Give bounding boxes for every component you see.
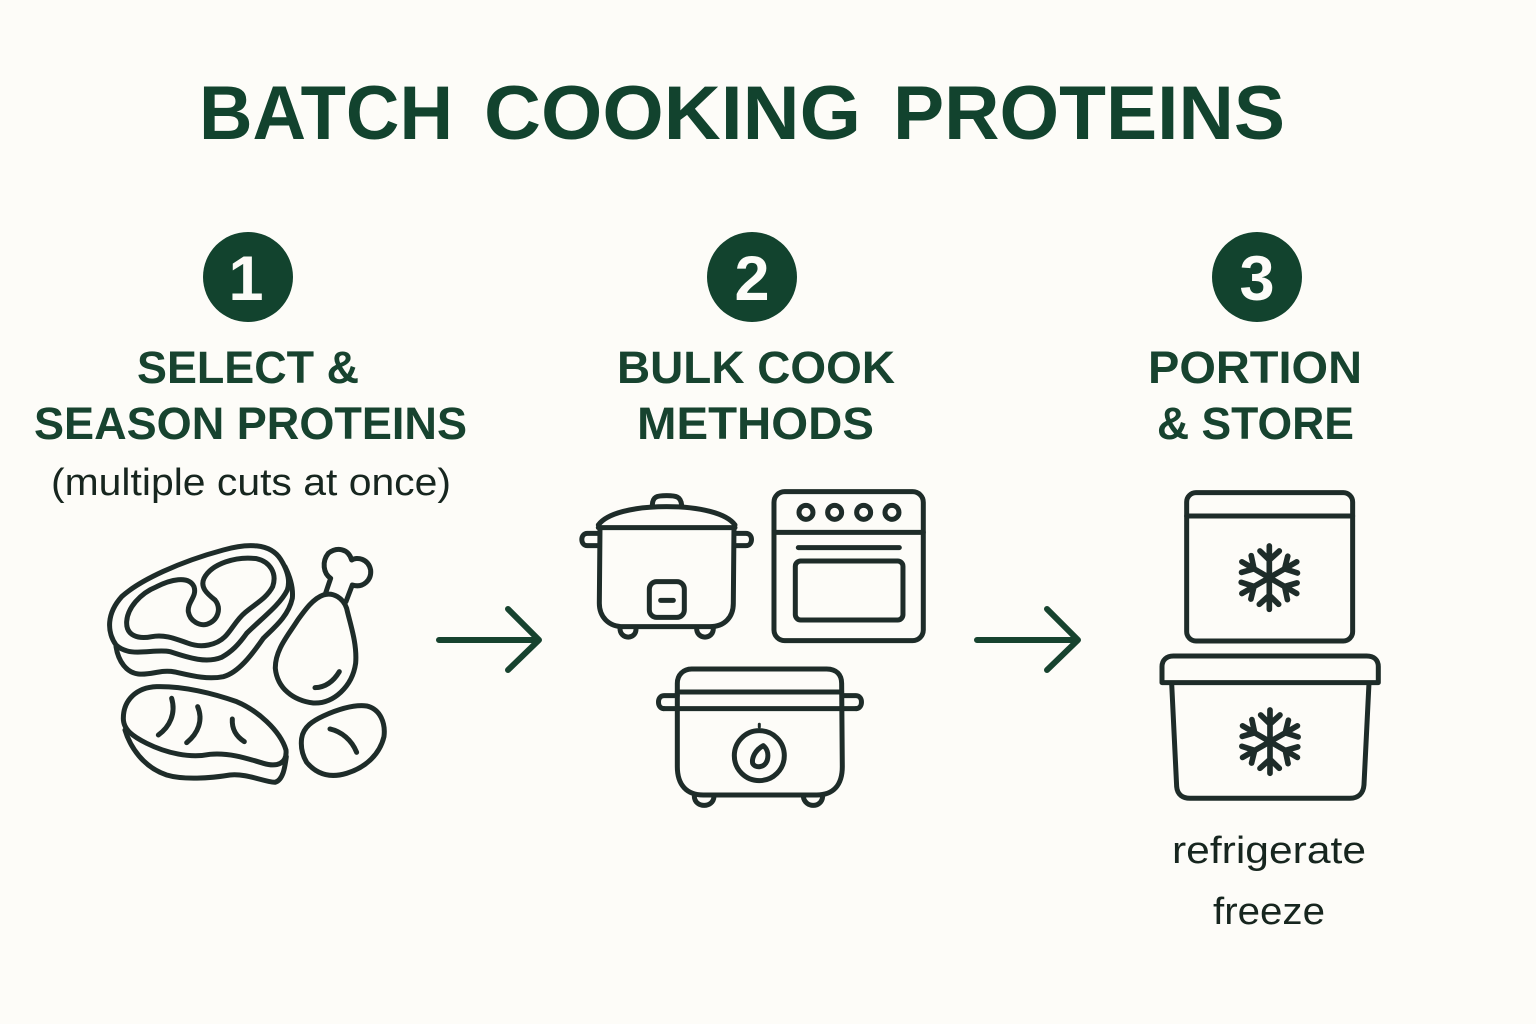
step 3 number badge xyxy=(1212,232,1302,322)
icon: storage containers xyxy=(1162,493,1378,798)
storage labels: refrigerate xyxy=(1172,830,1366,872)
arrow: step 2 to step 3 xyxy=(977,609,1078,670)
step 1 subtitle: (multiple cuts at once) xyxy=(51,462,451,504)
storage labels xyxy=(1172,830,1366,933)
step 3 number badge: 3 xyxy=(1239,244,1275,314)
icon: oven xyxy=(774,492,923,641)
step 1 heading: SELECT & xyxy=(137,342,359,393)
arrow: step 1 to step 2 xyxy=(439,609,539,670)
icon: cooking appliances xyxy=(582,492,923,805)
step 1 number badge xyxy=(203,232,293,322)
title: PROTEINS xyxy=(893,71,1285,156)
title: BATCH xyxy=(199,71,453,156)
icon: lower container with snowflake xyxy=(1162,656,1378,798)
step 2 column xyxy=(582,232,923,805)
step 2 heading xyxy=(617,342,896,449)
step 1 heading xyxy=(34,342,467,449)
icon: rice cooker xyxy=(582,496,751,637)
title: COOKING xyxy=(484,71,861,156)
step 2 heading: BULK COOK xyxy=(617,342,896,393)
icon: assorted protein cuts xyxy=(110,546,384,782)
step 2 heading: METHODS xyxy=(637,398,874,449)
step 3 heading: & STORE xyxy=(1157,398,1354,449)
icon: t-bone steak xyxy=(110,546,292,678)
step 3 heading: PORTION xyxy=(1148,342,1362,393)
step 1 number badge: 1 xyxy=(228,244,264,314)
step 3 heading xyxy=(1148,342,1362,449)
icon: upper container with snowflake xyxy=(1187,493,1353,641)
step 1 heading: SEASON PROTEINS xyxy=(34,398,467,449)
icon: chicken drumstick xyxy=(275,549,371,703)
icon: slow cooker xyxy=(658,669,861,805)
storage labels: freeze xyxy=(1213,891,1325,933)
step 1 column xyxy=(34,232,467,782)
title xyxy=(199,71,1285,156)
step 2 number badge xyxy=(707,232,797,322)
step 2 number badge: 2 xyxy=(734,244,770,314)
step 3 column xyxy=(1148,232,1378,933)
icon: chicken breast xyxy=(123,687,286,782)
icon: small fillet xyxy=(301,706,384,775)
